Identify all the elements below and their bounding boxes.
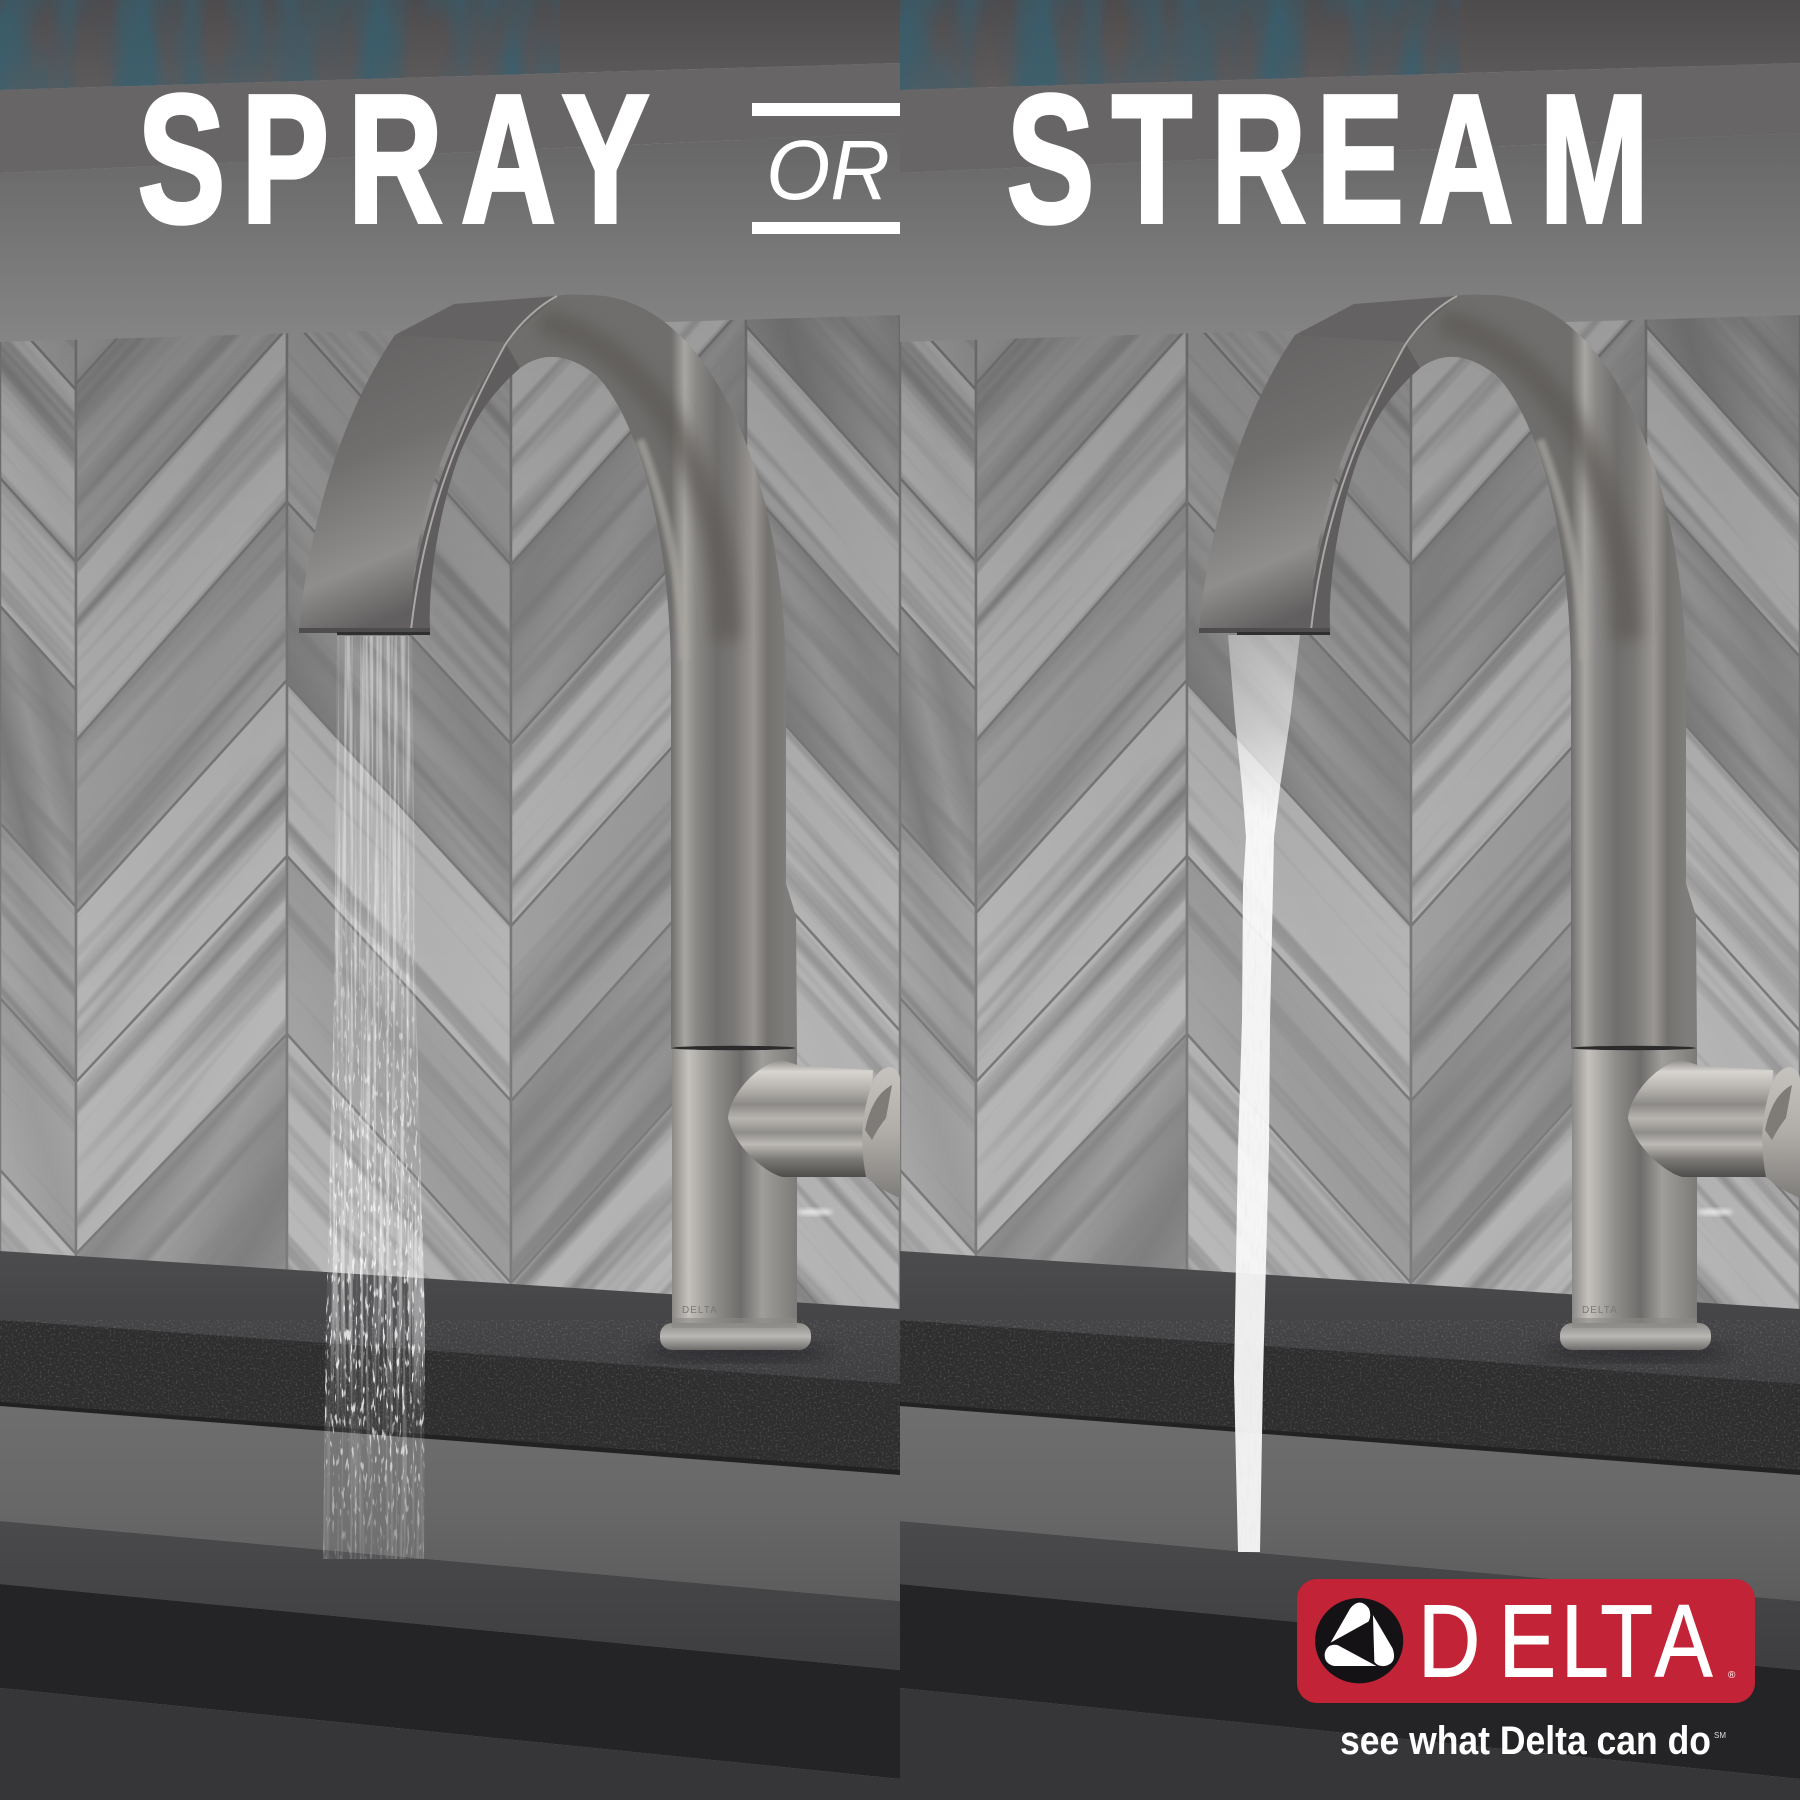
tagline: SM [1714, 1731, 1726, 1740]
logo: Delta badge [1297, 1579, 1755, 1703]
heading: STREAM: STREAM [1007, 57, 1649, 261]
registered mark: ® [1728, 1670, 1736, 1681]
heading: SPRAY: SPRAY [138, 57, 649, 261]
icon: Delta triangle mark [1315, 1598, 1403, 1683]
wordmark: DELTA: DELTA [1418, 1584, 1713, 1699]
text: OR: OR [766, 123, 890, 217]
panel: spray scene [0, 0, 900, 1800]
panel: stream scene [900, 0, 1800, 1800]
tagline: see what Delta can do [1340, 1719, 1711, 1763]
water: spray pattern [323, 636, 425, 1559]
divider: OR badge [752, 103, 900, 234]
water: laminar stream [1228, 635, 1300, 1552]
